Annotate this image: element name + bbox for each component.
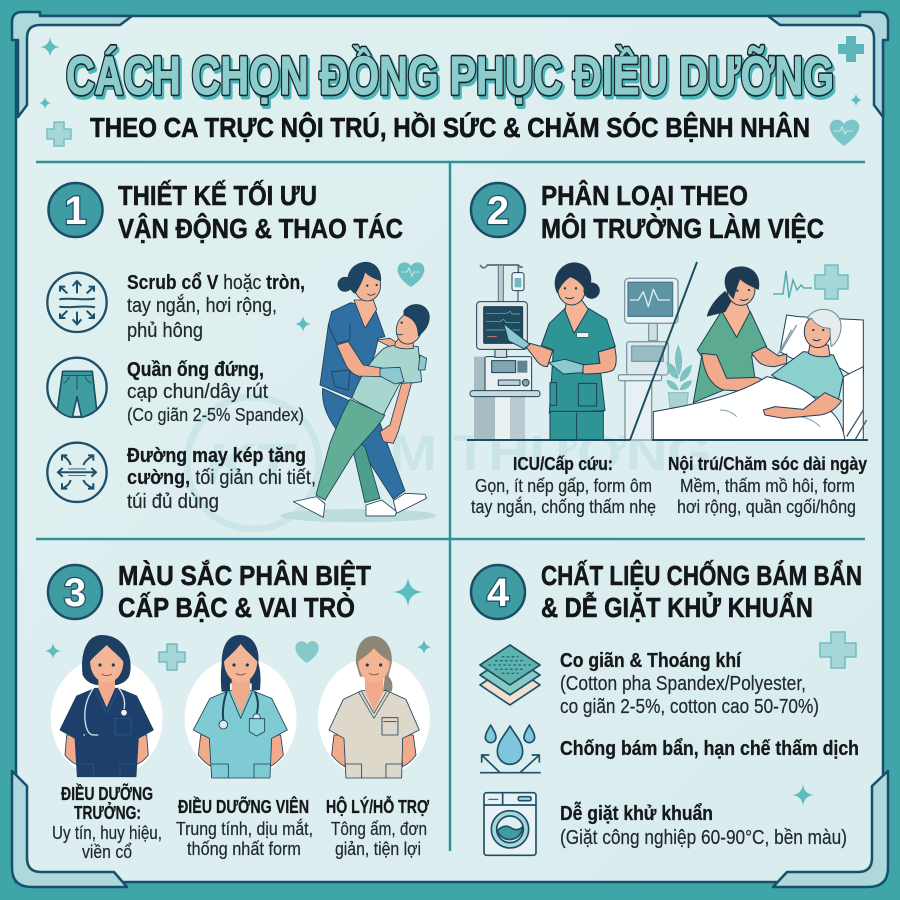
caption: assistant: Tông ấm, đơn (331, 818, 427, 839)
text block: pants: Quần ống đứng, (127, 359, 264, 381)
icon: heart (398, 262, 424, 287)
text block: scrub: Scrub cổ V hoặc tròn, (127, 272, 305, 294)
illustration: nurse supporting patient (280, 262, 437, 522)
heading 4 (541, 559, 862, 623)
icon: sparkle small left (39, 97, 51, 109)
caption: head nurse (52, 783, 162, 862)
icon: sparkle top left (40, 37, 60, 57)
watermark (187, 397, 712, 529)
caption: assistant: HỘ LÝ/HỖ TRỢ (326, 796, 429, 817)
icon: cross left (47, 122, 71, 146)
heading 2 (541, 180, 824, 244)
icon: large sparkle (393, 577, 423, 607)
text block: stretch: Co giãn & Thoáng khí (560, 650, 742, 672)
divider: diagonal (630, 262, 697, 440)
illustration: ICU nurse with monitors (470, 263, 678, 440)
caption: staff nurse (176, 796, 313, 859)
caption: ICU: tay ngắn, chống thấm nhẹ (471, 496, 656, 517)
corner frame: bottom right (773, 771, 888, 887)
number badge 3: 3 (64, 571, 86, 615)
caption: long-term care (668, 453, 868, 517)
icon: washing machine (484, 793, 536, 855)
heading 4: & DỄ GIẶT KHỬ KHUẨN (541, 591, 813, 623)
panel: section 3 (45, 560, 431, 862)
text block: seams: túi đủ dùng (127, 491, 219, 513)
heading 1 (118, 179, 403, 244)
heading 2: MÔI TRƯỜNG LÀM VIỆC (541, 212, 824, 244)
caption: ICU (471, 453, 656, 517)
caption: staff nurse: ĐIỀU DƯỠNG VIÊN (178, 796, 309, 817)
icon: sparkle (295, 316, 311, 332)
icon: heart right (830, 120, 859, 146)
heading 3: CẤP BẬC & VAI TRÒ (118, 592, 355, 623)
icon: water drops (480, 725, 541, 773)
icon: heart (295, 641, 319, 663)
text block: seams: Đường may kép tăng (127, 445, 306, 467)
icon: cross (159, 644, 185, 670)
number badge 1 (48, 183, 102, 237)
heading 3: MÀU SẮC PHÂN BIỆT (118, 560, 371, 591)
text block: scrub (127, 272, 305, 342)
panel: section 4 (471, 559, 862, 855)
text block: pants: cạp chun/dây rút (127, 381, 268, 403)
caption: ICU: Gọn, ít nếp gấp, form ôm (475, 475, 652, 496)
icon: pants (47, 358, 107, 417)
icon: cross (820, 632, 856, 668)
corner frame: top right (768, 12, 888, 117)
ground lines (467, 439, 868, 441)
icon: fabric layers (480, 645, 540, 705)
text block: pants: (Co giãn 2-5% Spandex) (127, 404, 304, 425)
text block: stretch (560, 650, 819, 718)
text block: seams (127, 445, 316, 513)
corner frame: bottom left (12, 771, 127, 887)
watermark: KIM THƯƠNG (332, 425, 712, 481)
icon: cross top right (838, 36, 864, 62)
caption: assistant: giản, tiện lợi (335, 838, 421, 859)
text block: seams: cường, tối giản chi tiết, (127, 467, 316, 489)
text block: scrub: tay ngắn, hơi rộng, (127, 294, 277, 317)
number badge 2: 2 (487, 189, 509, 233)
text block: stain resistant: Chống bám bẩn, hạn chế thấm dịch (560, 738, 859, 760)
icon: heartbeat line (773, 271, 812, 298)
icon: sparkle right (850, 94, 862, 106)
caption: assistant (326, 796, 429, 859)
corner frame: top left (12, 12, 132, 117)
text block: pants (127, 359, 304, 425)
icon: sparkle right (417, 640, 431, 654)
text block: washable (560, 801, 847, 849)
text block: washable: (Giặt công nghiệp 60-90°C, bền màu) (560, 827, 847, 849)
caption: long-term care: hơi rộng, quần cgối/hông (677, 496, 856, 517)
caption: head nurse: Uy tín, huy hiệu, (52, 822, 162, 843)
text block: stretch: (Cotton pha Spandex/Polyester, (560, 673, 806, 695)
text block: stretch: co giãn 2-5%, cotton cao 50-70%) (560, 696, 819, 718)
number badge 4 (471, 565, 525, 619)
icon: double seam (47, 443, 107, 502)
caption: head nurse: viền cổ (82, 841, 132, 862)
caption: staff nurse: Trung tính, dịu mắt, (176, 818, 313, 839)
number badge 2 (471, 183, 525, 237)
caption: ICU: ICU/Cấp cứu: (513, 453, 613, 474)
figure: staff nurse (185, 635, 297, 778)
icon: stretch fabric (47, 273, 107, 332)
panel: section 1 (47, 179, 437, 522)
watermark: KT (205, 432, 298, 497)
number badge 1: 1 (64, 189, 87, 233)
text block: washable: Dễ giặt khử khuẩn (560, 801, 713, 825)
heading 3 (118, 560, 371, 623)
heading 2: PHÂN LOẠI THEO (541, 180, 748, 211)
caption: head nurse: TRƯỞNG: (74, 802, 141, 823)
figure: head nurse (51, 635, 163, 777)
caption: long-term care: Mềm, thấm mồ hôi, form (680, 475, 855, 496)
caption: staff nurse: thống nhất form (187, 838, 301, 859)
heading 1: THIẾT KẾ TỐI ƯU (118, 179, 317, 211)
panel: section 2 (467, 180, 868, 517)
grid dividers (36, 162, 865, 851)
caption: head nurse: ĐIỀU DƯỠNG (61, 783, 153, 804)
number badge 3 (48, 565, 102, 619)
illustration: long-term care nurse and patient (653, 267, 867, 440)
icon: cross (815, 265, 848, 299)
figure: assistant (318, 636, 430, 778)
number badge 4: 4 (487, 571, 510, 615)
text block: scrub: phủ hông (127, 320, 203, 342)
caption: long-term care: Nội trú/Chăm sóc dài ngày (668, 453, 868, 474)
icon: sparkle left (45, 643, 61, 659)
heading 1: VẬN ĐỘNG & THAO TÁC (118, 212, 403, 244)
icon: sparkle (792, 784, 814, 806)
